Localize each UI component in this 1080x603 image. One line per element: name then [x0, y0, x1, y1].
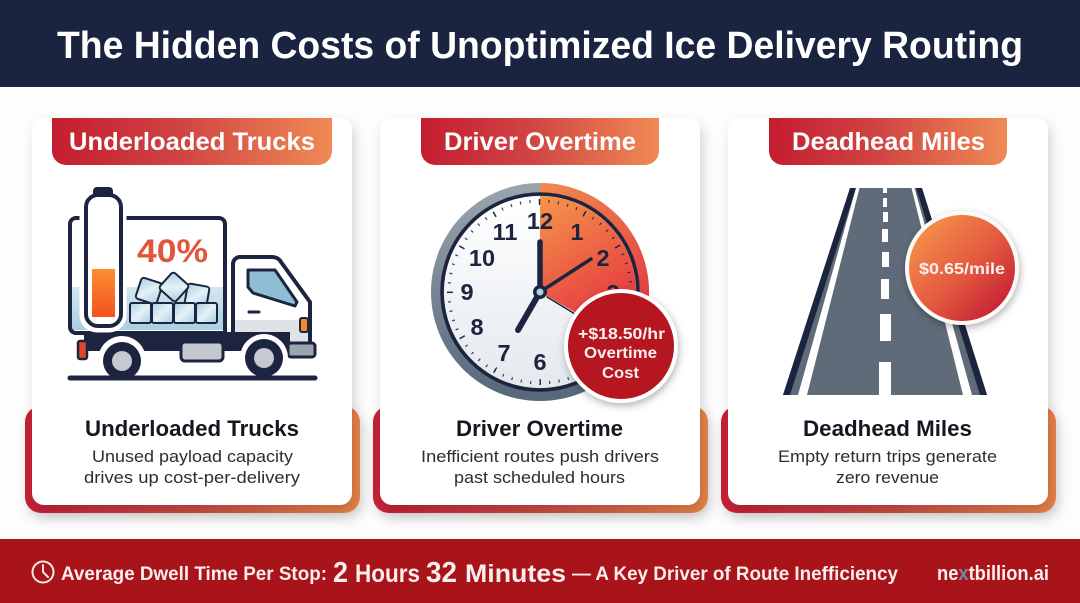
icon: footer clock	[32, 562, 54, 582]
truck cab	[233, 257, 310, 345]
ice cubes	[130, 271, 217, 323]
callout: overtime cost: Cost	[602, 365, 639, 382]
text: driver overtime: Driver Overtime	[456, 416, 623, 441]
heading pill: deadhead miles	[769, 118, 1007, 165]
panel: underloaded trucks	[25, 118, 360, 513]
clock numerals: 9	[460, 279, 474, 305]
text: driver overtime: Inefficient routes push drivers	[421, 447, 659, 466]
heading pill: driver overtime: Driver Overtime	[444, 128, 636, 156]
callout: overtime cost: Overtime	[584, 345, 657, 362]
footer statistic: Average Dwell Time Per Stop:	[61, 564, 327, 585]
footer statistic: — A Key Driver of Route Inefficiency	[572, 564, 898, 585]
clock numerals: 1	[570, 219, 584, 245]
title: The Hidden Costs of Unoptimized Ice Delivery Routing	[57, 25, 1023, 67]
clock numerals	[460, 208, 620, 375]
clock numerals: 12	[527, 208, 553, 234]
panel: driver overtime	[373, 118, 708, 513]
text: underloaded trucks: Underloaded Trucks	[85, 416, 299, 441]
clock numerals: 6	[533, 349, 547, 375]
icon: clock with overtime wedge	[431, 183, 678, 403]
logo: nextbillion.ai: nextbillion.ai	[937, 563, 1049, 585]
text: deadhead miles: Deadhead Miles	[803, 416, 972, 441]
clock numerals: 8	[470, 314, 484, 340]
clock hands	[518, 242, 591, 330]
battery gauge	[84, 187, 122, 328]
clock numerals: 7	[497, 340, 511, 366]
text: driver overtime	[421, 416, 659, 487]
footer statistic: Hours	[355, 560, 420, 588]
text: deadhead miles	[778, 416, 997, 487]
footer statistic: 2	[333, 557, 348, 589]
header banner	[0, 0, 1080, 87]
road centre dashes	[879, 188, 891, 395]
callout: cost per mile: $0.65/mile	[919, 261, 1005, 278]
callout: overtime cost: +$18.50/hr	[578, 326, 665, 343]
callout: overtime cost	[564, 289, 678, 403]
callout: cost per mile	[905, 211, 1019, 325]
icon: truck with ice and battery gauge	[70, 187, 315, 384]
footer statistic	[61, 557, 898, 589]
footer banner	[0, 539, 1080, 603]
text: driver overtime: past scheduled hours	[454, 468, 625, 487]
heading pill: underloaded trucks: Underloaded Trucks	[69, 128, 315, 156]
heading pill: underloaded trucks	[52, 118, 332, 165]
text: deadhead miles: zero revenue	[836, 468, 939, 487]
cargo label: 40%: 40%	[137, 233, 208, 269]
heading pill: driver overtime	[421, 118, 659, 165]
clock numerals: 10	[469, 245, 495, 271]
heading pill: deadhead miles: Deadhead Miles	[792, 128, 985, 156]
text: underloaded trucks: Unused payload capacity	[92, 447, 294, 466]
truck chassis and wheels	[70, 332, 315, 384]
text: underloaded trucks: drives up cost-per-delivery	[84, 468, 301, 487]
clock numerals: 2	[596, 245, 610, 271]
icon: road	[783, 188, 987, 395]
clock numerals: 11	[493, 219, 517, 245]
panel: deadhead miles	[721, 118, 1056, 513]
footer statistic: 32	[426, 557, 457, 589]
footer statistic: Minutes	[465, 560, 566, 588]
text: deadhead miles: Empty return trips generate	[778, 447, 997, 466]
text: underloaded trucks	[84, 416, 301, 487]
clock numerals: 3	[606, 280, 620, 306]
